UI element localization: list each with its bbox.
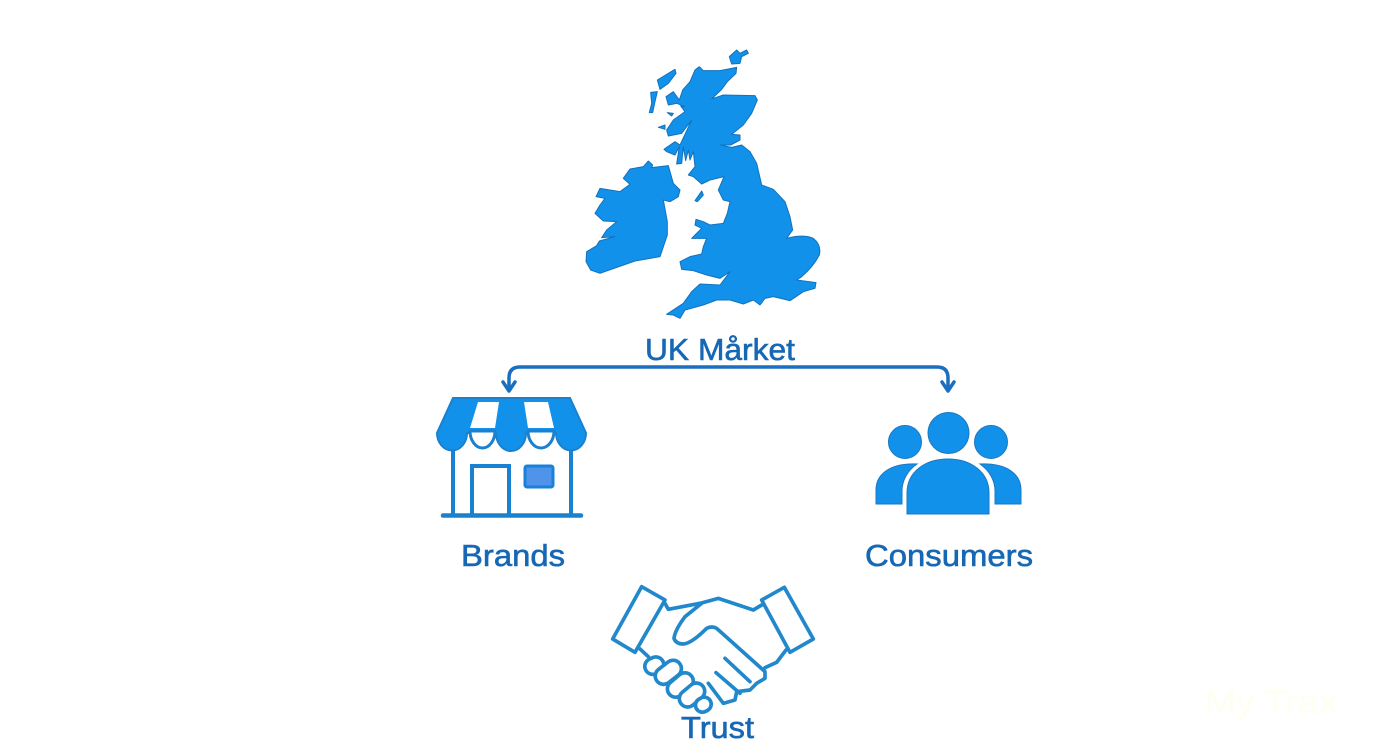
label: Brands: Brands	[461, 538, 565, 573]
arrow: market splits to brands and consumers	[503, 367, 954, 391]
label: Trust: Trust	[681, 710, 754, 745]
Scottish islands and Isle of Man	[649, 50, 748, 202]
arrowhead: consumers	[942, 382, 954, 391]
Ireland	[586, 161, 680, 273]
arrowhead: brands	[503, 382, 515, 391]
icon: handshake	[613, 587, 813, 715]
fingers	[642, 654, 714, 715]
heading: UK Market: UK Mårket	[645, 332, 795, 367]
label: Consumers: Consumers	[865, 538, 1033, 573]
hands	[640, 598, 786, 703]
watermark: My Trax	[1205, 684, 1337, 720]
store window	[525, 466, 553, 487]
cuffs	[613, 587, 813, 652]
store walls, door and base	[443, 448, 581, 516]
icon: map of UK and Ireland	[586, 50, 820, 318]
Great Britain	[664, 67, 820, 318]
icon: storefront	[437, 398, 586, 516]
striped awning	[437, 398, 586, 451]
icon: group of consumers	[876, 412, 1021, 514]
